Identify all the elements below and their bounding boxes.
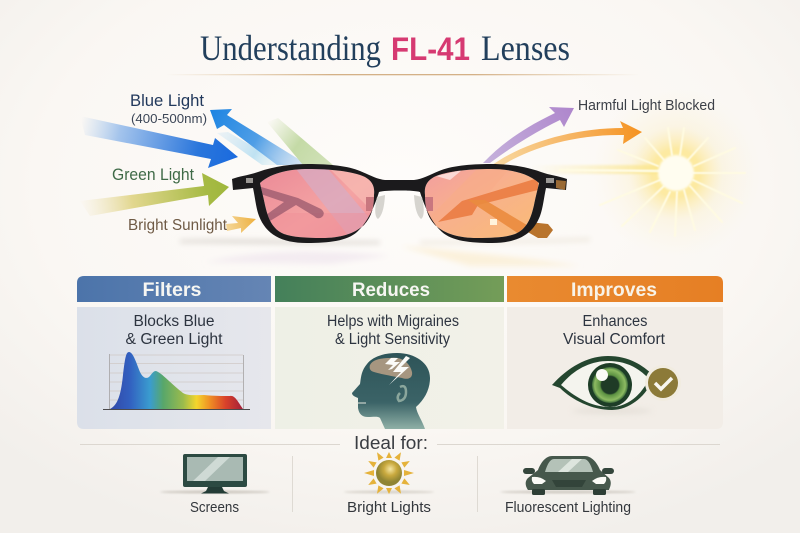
arrow: harmful light purple <box>483 107 574 163</box>
text: helps with migraines: Helps with Migraines <box>327 313 459 330</box>
header: improves: Improves <box>571 280 657 301</box>
panel: improves <box>507 276 723 429</box>
label: blue light: (400-500nm) <box>131 112 207 126</box>
text: blocks blue and green light: & Green Light <box>126 331 223 348</box>
item: screens: Screens <box>190 500 239 516</box>
body: filters <box>77 307 271 429</box>
text: enhances visual comfort: Enhances <box>582 313 648 330</box>
panel: filters <box>77 276 271 429</box>
item: screens <box>160 454 270 516</box>
streak: green <box>267 118 333 165</box>
left lens <box>260 169 374 238</box>
header: filters: Filters <box>142 280 202 301</box>
arrow: incoming blue light <box>80 116 238 168</box>
header: reduces <box>275 276 504 302</box>
body: reduces <box>275 307 504 429</box>
brain <box>370 358 412 379</box>
label: blue light: Blue Light <box>130 91 204 110</box>
icon: car <box>500 456 636 495</box>
header: filters <box>77 276 271 302</box>
icon: small sun <box>344 452 434 494</box>
right lens <box>424 169 539 238</box>
icon: monitor <box>160 454 270 494</box>
item: fluorescent lighting <box>500 456 636 516</box>
item: bright lights: Bright Lights <box>347 499 431 516</box>
sun rays <box>560 128 745 236</box>
floor reflections under glasses <box>180 238 590 266</box>
icon: head with migraine <box>352 353 430 429</box>
text: helps with migraines: & Light Sensitivity <box>335 331 450 348</box>
label: bright sunlight: Bright Sunlight <box>128 217 228 234</box>
title <box>200 28 570 68</box>
panel: reduces <box>275 276 504 429</box>
check badge <box>645 365 681 401</box>
header: improves <box>507 276 723 302</box>
lightning bolts <box>385 356 410 385</box>
body: improves <box>507 307 723 429</box>
frame <box>232 164 567 243</box>
title: Understanding <box>200 28 381 68</box>
nose pads <box>375 195 424 219</box>
streak: pale blue <box>217 132 285 165</box>
temple tip <box>526 222 553 238</box>
text: helps with migraines <box>327 313 459 348</box>
title: Lenses <box>481 28 570 68</box>
text: enhances visual comfort: Visual Comfort <box>563 331 666 348</box>
arrow: green light <box>80 173 229 216</box>
item: fluorescent lighting: Fluorescent Lighting <box>505 499 631 516</box>
hinges <box>246 178 554 183</box>
title: FL-41 <box>391 31 470 67</box>
spectrum chart <box>103 352 250 410</box>
ear <box>398 386 406 401</box>
label: green light: Green Light <box>112 165 194 184</box>
icon: eye with check <box>552 356 681 414</box>
text: blocks blue and green light <box>126 313 223 348</box>
arrow: harmful light orange <box>492 121 642 165</box>
arrow: bright sunlight <box>226 216 256 233</box>
sun <box>530 88 761 258</box>
arrow: reflected blue light <box>210 109 308 165</box>
text: enhances visual comfort <box>563 313 666 348</box>
label: blue light <box>130 91 207 126</box>
glasses <box>232 164 567 245</box>
dividers <box>80 444 720 512</box>
label: harmful light blocked: Harmful Light Blocked <box>578 97 715 114</box>
item: bright lights <box>344 452 434 516</box>
heading: ideal for: Ideal for: <box>354 432 428 453</box>
text: blocks blue and green light: Blocks Blue <box>134 313 214 330</box>
header: reduces: Reduces <box>352 280 430 301</box>
